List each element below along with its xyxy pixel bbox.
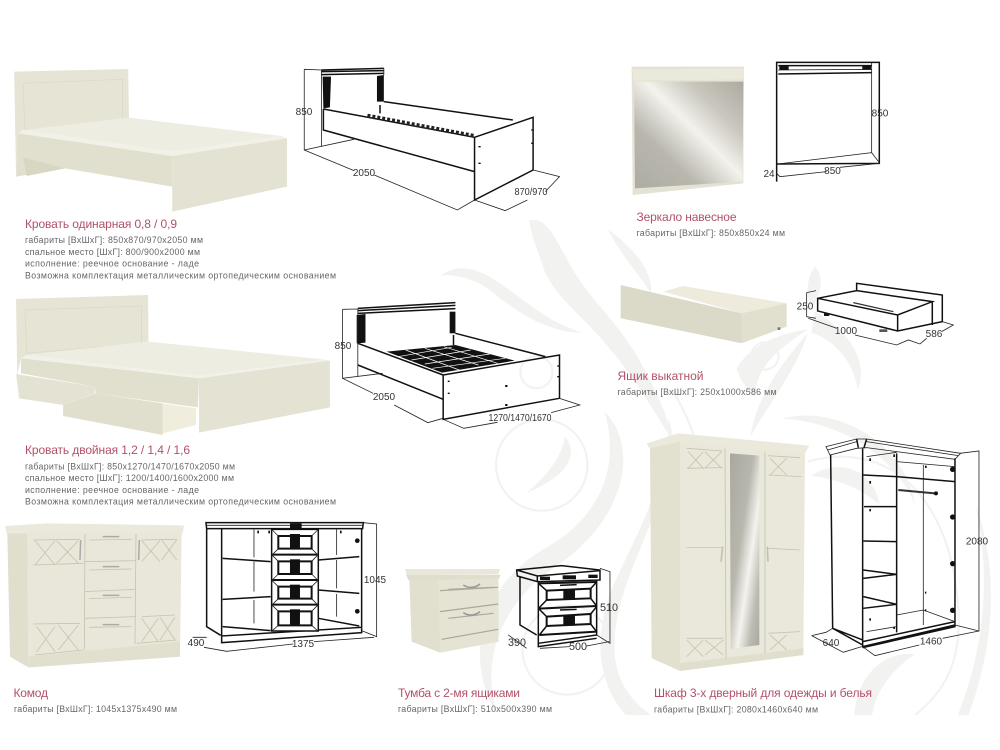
specs: wardrobe: габариты [ВхШхГ]: 2080х1460х640 мм [654, 704, 818, 714]
panel: wardrobe [647, 433, 989, 714]
specs: double bed: Возможна комплектация металлическим ортопедическим основанием [25, 496, 336, 506]
drawing: single bed [304, 68, 560, 211]
specs: mirror: габариты [ВхШхГ]: 850х850х24 мм [636, 228, 785, 238]
drawing: nightstand [508, 566, 610, 648]
dimension: width: 1270/1470/1670 [488, 413, 552, 424]
dimension: height: 250 [797, 302, 814, 312]
dimension: width: 850 [824, 166, 841, 177]
specs: double bed [25, 462, 336, 506]
specs: single bed: спальное место [ШхГ]: 800/900х2000 мм [25, 247, 200, 257]
panel: chest of drawers [5, 523, 387, 714]
dimension: height: 1045 [364, 575, 387, 586]
dimension: depth: 490 [188, 638, 205, 649]
drawing: wardrobe [812, 439, 979, 656]
specs: double bed: исполнение: реечное основание - ладе [25, 485, 199, 495]
title: mirror: Зеркало навесное [636, 210, 737, 224]
background floral ornament [440, 220, 991, 715]
photo: wardrobe [647, 433, 809, 671]
specs: double bed: габариты [ВхШхГ]: 850х1270/1470/1670х2050 мм [25, 462, 235, 472]
photo: mirror [632, 67, 744, 195]
dimension: width: 500 [569, 641, 587, 653]
dimension: height: 850 [296, 107, 313, 118]
dimension: height: 850 [872, 108, 889, 120]
dimension: height: 510 [600, 602, 618, 614]
title: double bed: Кровать двойная 1,2 / 1,4 / 1,6 [25, 443, 190, 457]
dimension: width: 586 [926, 329, 943, 340]
specs: single bed [25, 235, 336, 280]
drawing: double bed [343, 303, 580, 428]
dimension: length: 2050 [373, 392, 396, 403]
title: nightstand: Тумба с 2-мя ящиками [398, 686, 520, 700]
dimension: depth: 640 [823, 638, 840, 649]
dimension: height: 850 [335, 341, 352, 352]
specs: single bed: габариты [ВхШхГ]: 850х870/970х2050 мм [25, 235, 203, 245]
photo: double bed [16, 295, 330, 435]
title: wardrobe: Шкаф 3-х дверный для одежды и белья [654, 686, 872, 700]
dimension: width: 870/970 [514, 187, 548, 198]
panel: double bed [16, 295, 580, 506]
dimension: depth: 390 [508, 637, 526, 649]
panel: nightstand [398, 566, 618, 714]
specs: chest of drawers: габариты [ВхШхГ]: 1045х1375х490 мм [14, 704, 177, 714]
photo: nightstand [405, 569, 501, 653]
title: drawer: Ящик выкатной [618, 369, 704, 383]
photo: drawer [621, 285, 787, 343]
panel: drawer [618, 283, 953, 397]
title: single bed: Кровать одинарная 0,8 / 0,9 [25, 217, 177, 231]
drawing: chest of drawers [193, 523, 377, 651]
specs: double bed: спальное место [ШхГ]: 1200/1400/1600х2000 мм [25, 473, 234, 483]
panel: single bed [14, 68, 560, 280]
specs: drawer: габариты [ВхШхГ]: 250х1000х586 мм [618, 387, 776, 397]
photo: single bed [14, 69, 287, 212]
title: chest of drawers: Комод [14, 686, 48, 700]
drawing: mirror [777, 62, 879, 182]
dimension: width: 1460 [920, 636, 943, 648]
dimension: length: 2050 [353, 168, 376, 179]
specs: nightstand: габариты [ВхШхГ]: 510х500х390 мм [398, 704, 552, 714]
specs: single bed: исполнение: реечное основание - ладе [25, 258, 199, 268]
drawing: drawer [807, 283, 953, 345]
specs: single bed: Возможна комплектация металлическим ортопедическим основанием [25, 270, 336, 280]
dimension: depth: 24 [763, 169, 775, 180]
dimension: width: 1375 [292, 639, 315, 650]
photo: chest of drawers [5, 523, 184, 667]
panel: mirror [632, 62, 889, 238]
dimension: length: 1000 [835, 326, 858, 337]
dimension: height: 2080 [966, 536, 989, 548]
